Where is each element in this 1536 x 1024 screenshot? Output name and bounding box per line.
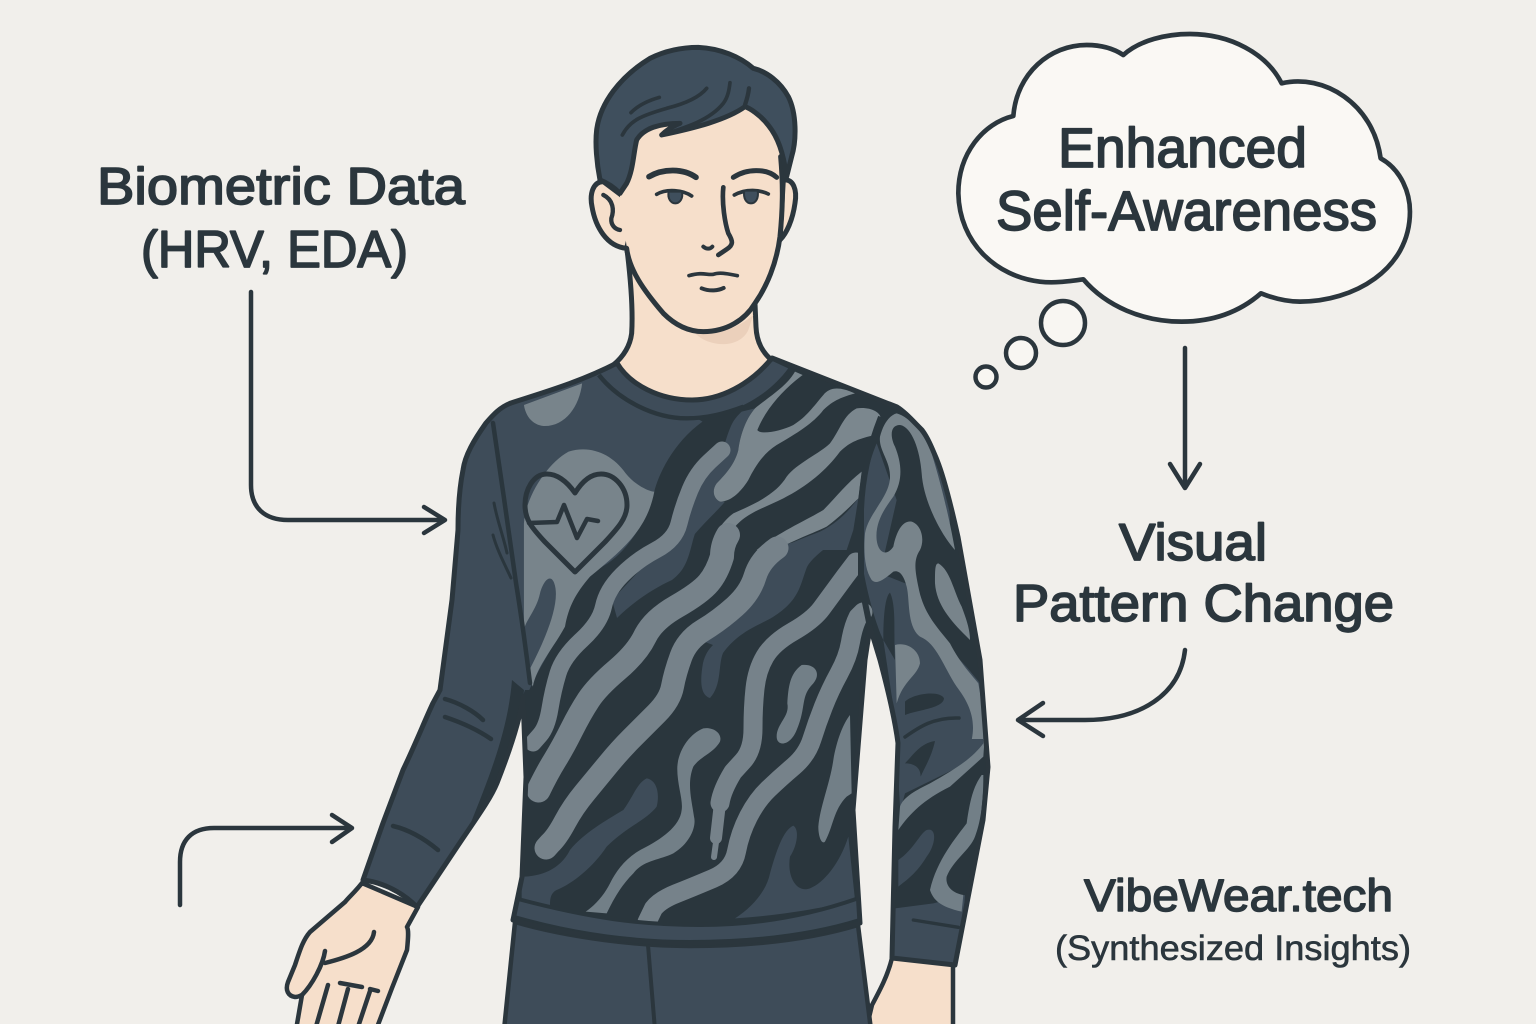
trousers — [504, 922, 871, 1024]
mid-tone patches between stripes — [613, 534, 823, 698]
label: visual pattern change: Pattern Change — [1013, 575, 1394, 633]
sleeve crease — [905, 718, 959, 737]
left hand — [287, 883, 418, 1024]
icon: heart with pulse — [525, 474, 627, 572]
thought cloud: enhanced self-awareness: Self-Awareness — [996, 179, 1377, 242]
patterned shirt — [366, 362, 986, 962]
shirt outline — [363, 358, 988, 965]
arrow: cloud to visual pattern change — [1170, 348, 1200, 488]
hem band — [516, 898, 858, 940]
ears — [591, 180, 796, 248]
left sleeve shading and creases — [393, 423, 530, 850]
brand text — [1055, 870, 1411, 968]
brand text: VibeWear.tech — [1084, 870, 1393, 921]
chin shadow — [695, 315, 753, 344]
lower sleeve patterns — [894, 739, 984, 962]
right hand — [866, 958, 953, 1024]
upper right chest patterns — [680, 372, 881, 550]
arrow: pattern change to sleeve — [1018, 650, 1185, 736]
label: visual pattern change — [1013, 514, 1394, 633]
face — [620, 107, 783, 332]
person illustration — [287, 47, 1020, 1024]
brand text: (Synthesized Insights) — [1055, 929, 1411, 968]
eyes — [668, 191, 758, 203]
left sleeve — [366, 444, 525, 903]
label: biometric data: (HRV, EDA) — [141, 221, 408, 279]
light flowing stripes — [533, 450, 863, 922]
upper left chest patterns — [524, 372, 702, 690]
hair strands and facial features — [603, 83, 777, 290]
lower torso patterns — [522, 665, 855, 918]
thought cloud: enhanced self-awareness: Enhanced — [1058, 116, 1307, 179]
thought cloud: enhanced self-awareness — [958, 34, 1410, 322]
neck — [613, 247, 773, 423]
collar — [599, 360, 788, 418]
jaw line — [627, 157, 782, 332]
hair — [596, 47, 795, 193]
arrow: feedback to arm — [180, 815, 352, 905]
right sleeve patterns — [861, 413, 988, 740]
right armhole seam — [861, 417, 881, 627]
arrow: biometric data to shirt — [251, 292, 445, 533]
thought bubbles — [976, 301, 1085, 388]
label: biometric data: Biometric Data — [97, 158, 465, 216]
label: biometric data — [97, 158, 465, 279]
label: visual pattern change: Visual — [1119, 514, 1267, 572]
